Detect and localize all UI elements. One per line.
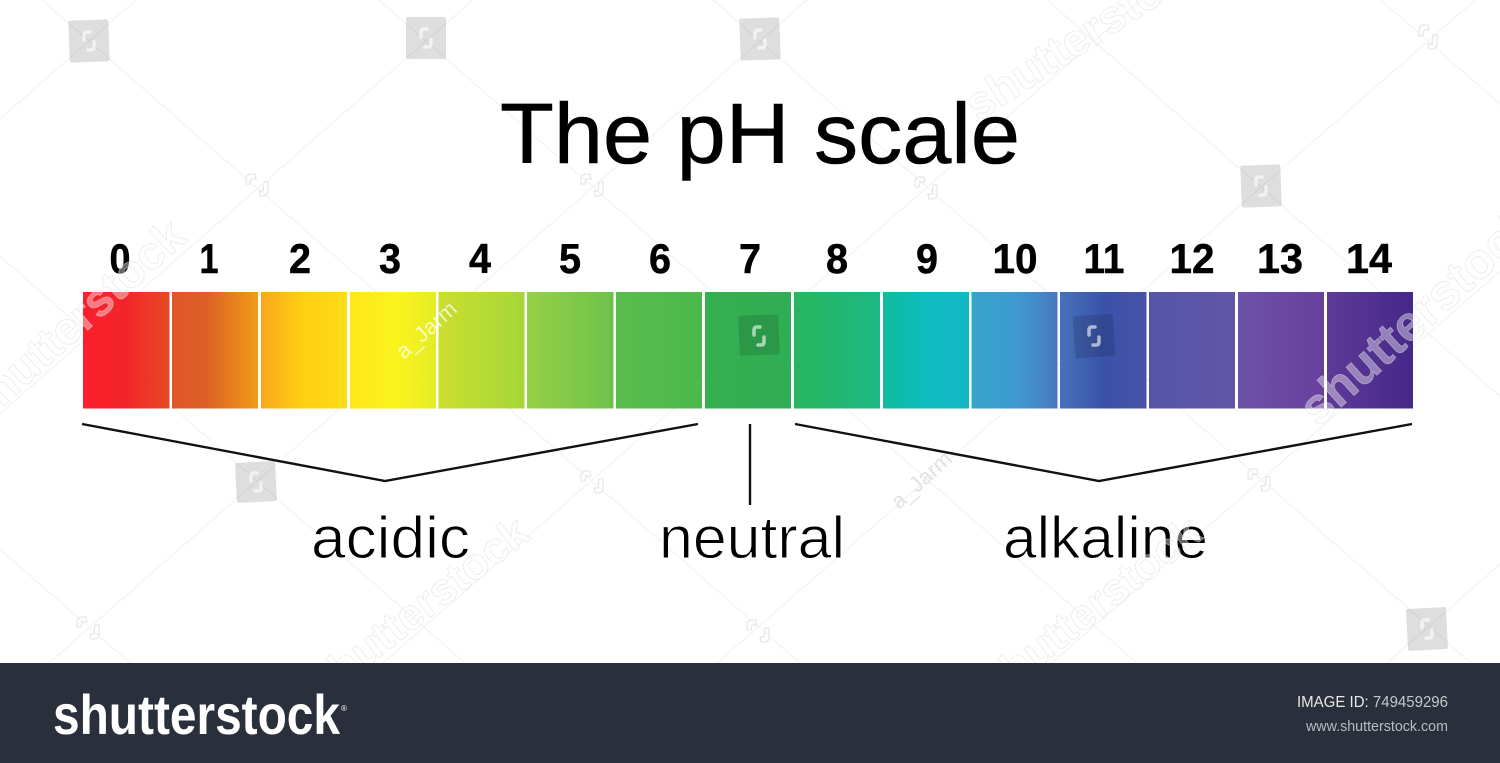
- acidic label: acidic: [311, 505, 470, 571]
- acidic bracket: [82, 424, 698, 481]
- pH number labels: 11: [1084, 235, 1124, 282]
- watermark overlays: shutterstock: [972, 507, 1211, 708]
- pH number labels: 6: [649, 235, 671, 282]
- pH number labels: 4: [469, 235, 492, 282]
- pH number labels: 7: [739, 235, 761, 282]
- watermark overlays: shutterstock: [300, 507, 539, 708]
- pH number labels: 2: [289, 235, 311, 282]
- pH number labels: 13: [1257, 235, 1303, 282]
- alkaline bracket: [795, 424, 1412, 481]
- pH number labels: [110, 235, 1393, 282]
- registered mark: ®: [341, 704, 347, 713]
- pH number labels: 8: [826, 235, 848, 282]
- pH number labels: 0: [110, 235, 130, 282]
- neutral line: [749, 424, 751, 505]
- pH colour bar: [83, 292, 1413, 408]
- pH number labels: 14: [1346, 235, 1393, 282]
- pH number labels: 5: [559, 235, 581, 282]
- image id: IMAGE ID: 749459296: [1297, 694, 1448, 711]
- shutterstock logo: shutterstock: [53, 683, 341, 746]
- neutral label: neutral: [659, 505, 845, 571]
- pH number labels: 12: [1170, 235, 1214, 282]
- footer bar: [0, 663, 1500, 763]
- pH number labels: 10: [992, 235, 1038, 282]
- pH number labels: 3: [379, 235, 401, 282]
- pH number labels: 1: [200, 235, 218, 282]
- website: www.shutterstock.com: [1305, 719, 1448, 735]
- pH number labels: 9: [916, 235, 938, 282]
- title: The pH scale: [500, 87, 1020, 182]
- alkaline label: alkaline: [1003, 505, 1208, 571]
- photographer credit: a_Jarm: [886, 446, 957, 514]
- photographer credit: a_Jarm: [391, 296, 462, 364]
